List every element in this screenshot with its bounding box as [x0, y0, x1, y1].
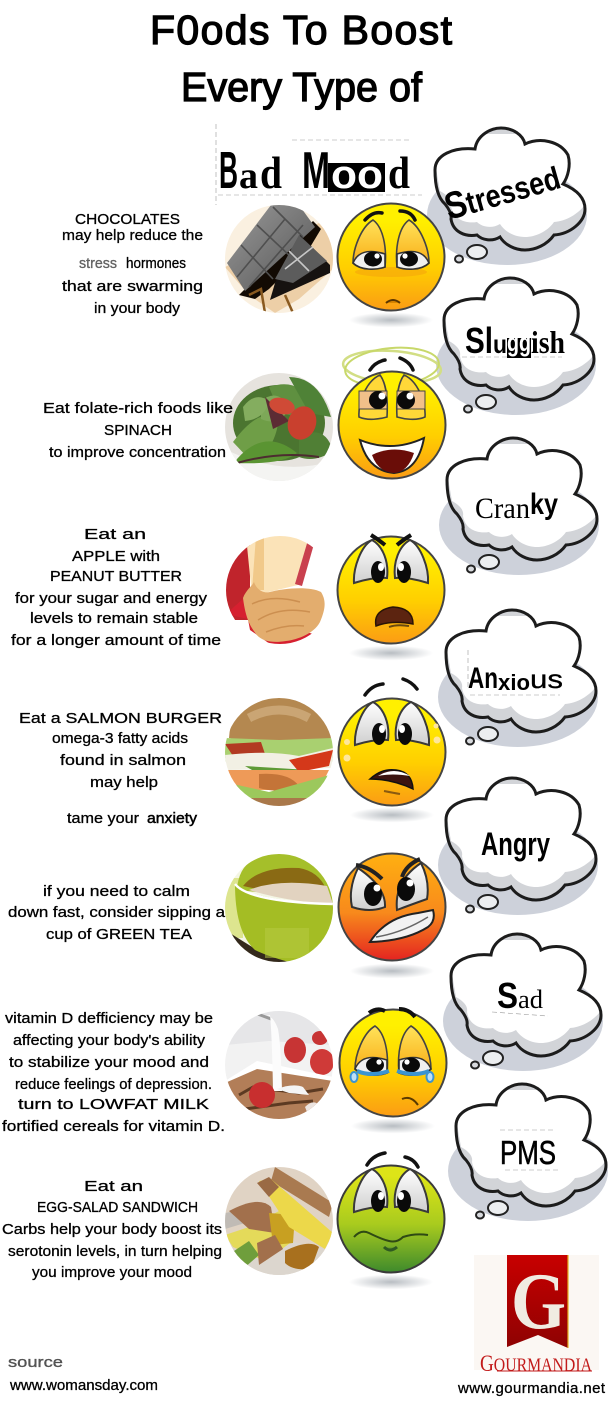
thought cloud: Sluggish: Sl: [465, 320, 493, 361]
thought cloud: Cranky: ky: [530, 488, 558, 521]
text: salmon burger: anxiety: [147, 810, 198, 827]
text: apple and peanut butter: APPLE with: [72, 548, 160, 565]
thought cloud: Cranky: [439, 438, 602, 575]
text: green tea: cup of GREEN TEA: [46, 926, 192, 943]
text: salmon burger: may help: [90, 774, 158, 791]
emoji: anxious face: [338, 679, 446, 822]
text: salmon burger: tame your: [67, 810, 139, 827]
title line 2: Every Type of: [181, 64, 423, 110]
text: salmon burger: [19, 710, 222, 827]
text: green tea: down fast, consider sipping a: [8, 904, 226, 921]
text: chocolates: stress: [79, 255, 117, 272]
text: lowfat milk: affecting your body's ability: [13, 1032, 206, 1049]
text: chocolates: [62, 211, 203, 317]
thought cloud: Angry: Angry: [481, 826, 550, 862]
panel: cranky: [11, 438, 602, 660]
text: apple and peanut butter: PEANUT BUTTER: [50, 568, 182, 585]
emoji: stressed face: [338, 204, 444, 328]
logo url: www.gourmandia.net: [457, 1380, 606, 1397]
text: egg salad sandwich: Eat an: [84, 1178, 143, 1195]
panel: pms: [2, 1084, 609, 1290]
text: salmon burger: found in salmon: [60, 752, 186, 769]
thought cloud: Sad: S: [497, 975, 518, 1016]
thought cloud: Anxious: xio: [498, 670, 530, 695]
emoji: angry face: [338, 854, 446, 978]
thought cloud: Angry: [438, 778, 601, 915]
title: [150, 7, 453, 205]
text: apple and peanut butter: [11, 526, 221, 649]
logo banner: G: [511, 1258, 566, 1346]
text: egg salad sandwich: you improve your mood: [32, 1264, 192, 1281]
text: chocolates: hormones: [126, 255, 186, 272]
panel: angry: [8, 778, 601, 978]
text: spinach: Eat folate-rich foods like: [43, 400, 233, 417]
source credit: [8, 1354, 158, 1394]
photo: cereal and milk: [225, 1011, 334, 1119]
thought cloud: Stressed: Stressed: [440, 156, 565, 229]
thought cloud: Sluggish: [436, 278, 599, 415]
title line 3: ransom note Bad Mood: d: [260, 147, 282, 198]
title line 3: ransom note Bad Mood: B: [219, 142, 238, 200]
thought cloud: PMS: PMS: [500, 1134, 556, 1171]
text: salmon burger: omega-3 fatty acids: [52, 730, 188, 747]
text: apple and peanut butter: levels to remain stable: [30, 610, 198, 627]
title line 3: ransom note Bad Mood: [216, 124, 422, 205]
thought cloud: Anxious: [438, 610, 601, 747]
text: green tea: if you need to calm: [43, 883, 190, 900]
text: apple and peanut butter: Eat an: [84, 526, 146, 543]
panel: anxious: [19, 610, 601, 827]
text: lowfat milk: reduce feelings of depression.: [15, 1076, 212, 1093]
thought cloud: Anxious: An: [468, 662, 498, 695]
emoji: sluggish face: [338, 344, 446, 478]
text: apple and peanut butter: for your sugar and energy: [15, 590, 208, 607]
text: spinach: [43, 400, 233, 461]
emoji: pms face: [338, 1153, 444, 1290]
panel: sluggish: [43, 278, 599, 481]
thought cloud: Sluggish: gg: [507, 327, 531, 357]
photo: apple with peanut butter: [226, 536, 334, 644]
text: egg salad sandwich: [2, 1178, 222, 1281]
thought cloud: Anxious: us: [530, 664, 563, 694]
text: lowfat milk: fortified cereals for vitamin D.: [2, 1118, 225, 1135]
title line 3: ransom note Bad Mood: oo: [331, 153, 383, 197]
text: lowfat milk: [2, 1010, 225, 1135]
title line 3: ransom note Bad Mood: d: [388, 147, 410, 198]
logo wordmark: GOURMANDIA: [480, 1351, 592, 1376]
thought cloud: Sluggish: u: [493, 329, 507, 359]
thought cloud: Sad: [443, 934, 606, 1071]
thought cloud: PMS: [448, 1084, 609, 1221]
title line 3: ransom note Bad Mood: M: [302, 142, 330, 200]
text: chocolates: may help reduce the: [62, 227, 203, 244]
text: green tea: [8, 883, 226, 943]
text: lowfat milk: to stabilize your mood and: [9, 1054, 209, 1071]
logo: Gourmandia: [457, 1255, 606, 1397]
photo: spinach salad: [225, 373, 333, 481]
thought cloud: Cranky: Cran: [475, 492, 530, 525]
emoji: sad face: [340, 1009, 446, 1134]
text: egg salad sandwich: serotonin levels, in turn helping: [8, 1243, 222, 1260]
photo: chocolate: [225, 205, 333, 313]
photo: green tea cup: [225, 854, 333, 962]
title line 1: F0ods To Boost: [150, 7, 453, 53]
source url: www.womansday.com: [9, 1377, 158, 1394]
text: egg salad sandwich: EGG-SALAD SANDWICH: [37, 1199, 198, 1216]
thought cloud: Sluggish: ish: [531, 324, 565, 360]
text: spinach: to improve concentration: [49, 444, 226, 461]
text: egg salad sandwich: Carbs help your body boost its: [2, 1221, 222, 1238]
text: salmon burger: Eat a SALMON BURGER: [19, 710, 222, 727]
emoji: cranky face: [338, 535, 444, 660]
photo: salmon burger: [225, 698, 333, 806]
text: lowfat milk: vitamin D defficiency may be: [5, 1010, 213, 1027]
text: chocolates: that are swarming: [62, 278, 203, 295]
panel: sad: [2, 934, 606, 1135]
text: lowfat milk: turn to LOWFAT MILK: [18, 1096, 209, 1113]
title line 3: ransom note Bad Mood: a: [239, 155, 258, 197]
photo: egg salad sandwich: [225, 1167, 333, 1275]
thought cloud: Sad: ad: [518, 985, 543, 1014]
text: spinach: SPINACH: [104, 422, 172, 439]
text: chocolates: in your body: [94, 300, 181, 317]
text: apple and peanut butter: for a longer amount of time: [11, 632, 221, 649]
thought cloud: Stressed: [427, 128, 590, 265]
text: chocolates: CHOCOLATES: [75, 211, 180, 228]
source label: source: [8, 1354, 63, 1371]
panel: stressed: [62, 128, 590, 328]
